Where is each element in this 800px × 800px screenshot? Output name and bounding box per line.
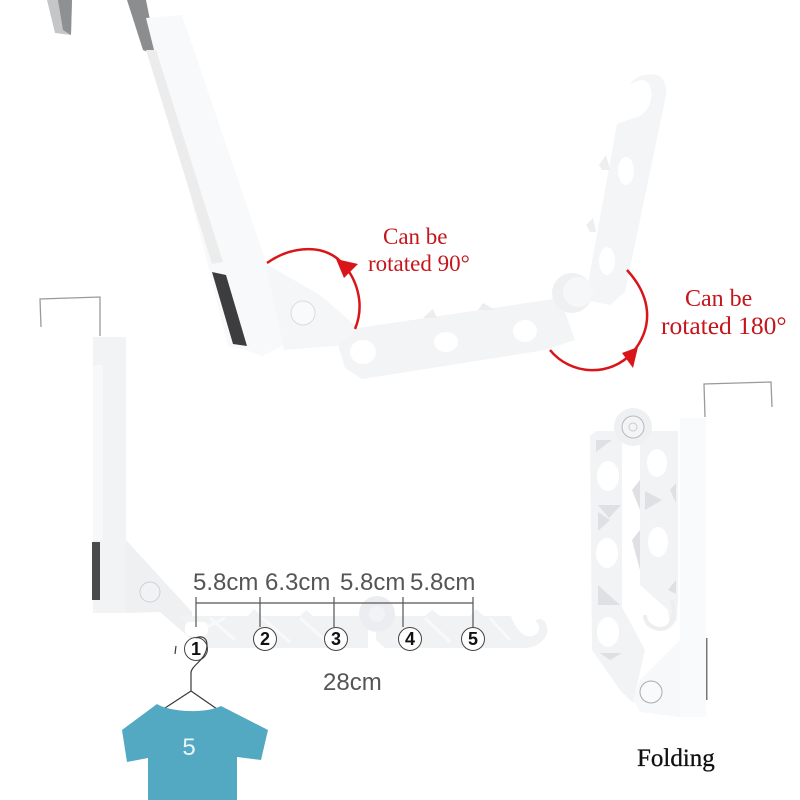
folded hanger: right arm with hook — [632, 431, 678, 629]
red label: can be rotated 90 — [368, 224, 470, 276]
left hanger: extended arm with hook — [180, 596, 547, 648]
top hanger: rotating hinge plate — [266, 264, 358, 350]
measurement labels: 5.8cm — [193, 569, 258, 596]
measurement labels: 5.8cm — [410, 569, 475, 596]
red arrow: 90 degree rotation — [267, 249, 360, 329]
hanging position marker 1: 1 — [191, 639, 201, 659]
folded hanger: bottom hinge plate — [633, 640, 680, 717]
t-shirt icon with count: 5 — [182, 734, 196, 761]
measurement bracket — [196, 597, 473, 627]
hanging position marker 4: 4 — [405, 629, 415, 649]
red label: can be rotated 180 — [661, 286, 787, 340]
hanging position marker 2: 2 — [260, 629, 270, 649]
left hanger: hinge plate — [126, 540, 192, 640]
hanging position marker 3: 3 — [331, 629, 341, 649]
top hanger: first arm segment — [338, 298, 575, 379]
red label: can be rotated 180: rotated 180° — [661, 311, 787, 340]
hanging position marker 4 — [398, 628, 422, 650]
top hanger: second arm segment with hook — [552, 74, 666, 313]
t-shirt icon with count — [122, 704, 268, 800]
coat hanger — [165, 637, 217, 709]
total length label: 28cm — [323, 669, 382, 696]
red arrow: 180 degree rotation — [550, 270, 647, 370]
red label: can be rotated 180: Can be — [685, 286, 752, 312]
top hanger: mounting bar rotated — [127, 0, 284, 356]
folded hanger: wire hook — [704, 382, 772, 417]
top hanger: door hook fragment — [47, 0, 72, 35]
hanging position marker 1 — [184, 638, 208, 660]
hanging position marker 2 — [254, 628, 276, 650]
folded hanger: top joint — [614, 408, 652, 446]
hanging position marker 3 — [324, 628, 348, 650]
measurement labels: 6.3cm — [265, 569, 330, 596]
measurement labels — [193, 569, 475, 596]
hanging position marker 5 — [462, 628, 484, 650]
folded hanger: left arm — [590, 431, 645, 703]
left hanger: mounting bar — [92, 337, 126, 613]
caption: folding: Folding — [637, 745, 715, 772]
red label: can be rotated 90: rotated 90° — [368, 251, 470, 276]
red label: can be rotated 90: Can be — [383, 224, 448, 249]
measurement labels: 5.8cm — [340, 569, 405, 596]
folded hanger: mounting bar — [680, 418, 708, 717]
hanging position marker 5: 5 — [468, 629, 478, 649]
left hanger: wire hook — [40, 297, 100, 336]
